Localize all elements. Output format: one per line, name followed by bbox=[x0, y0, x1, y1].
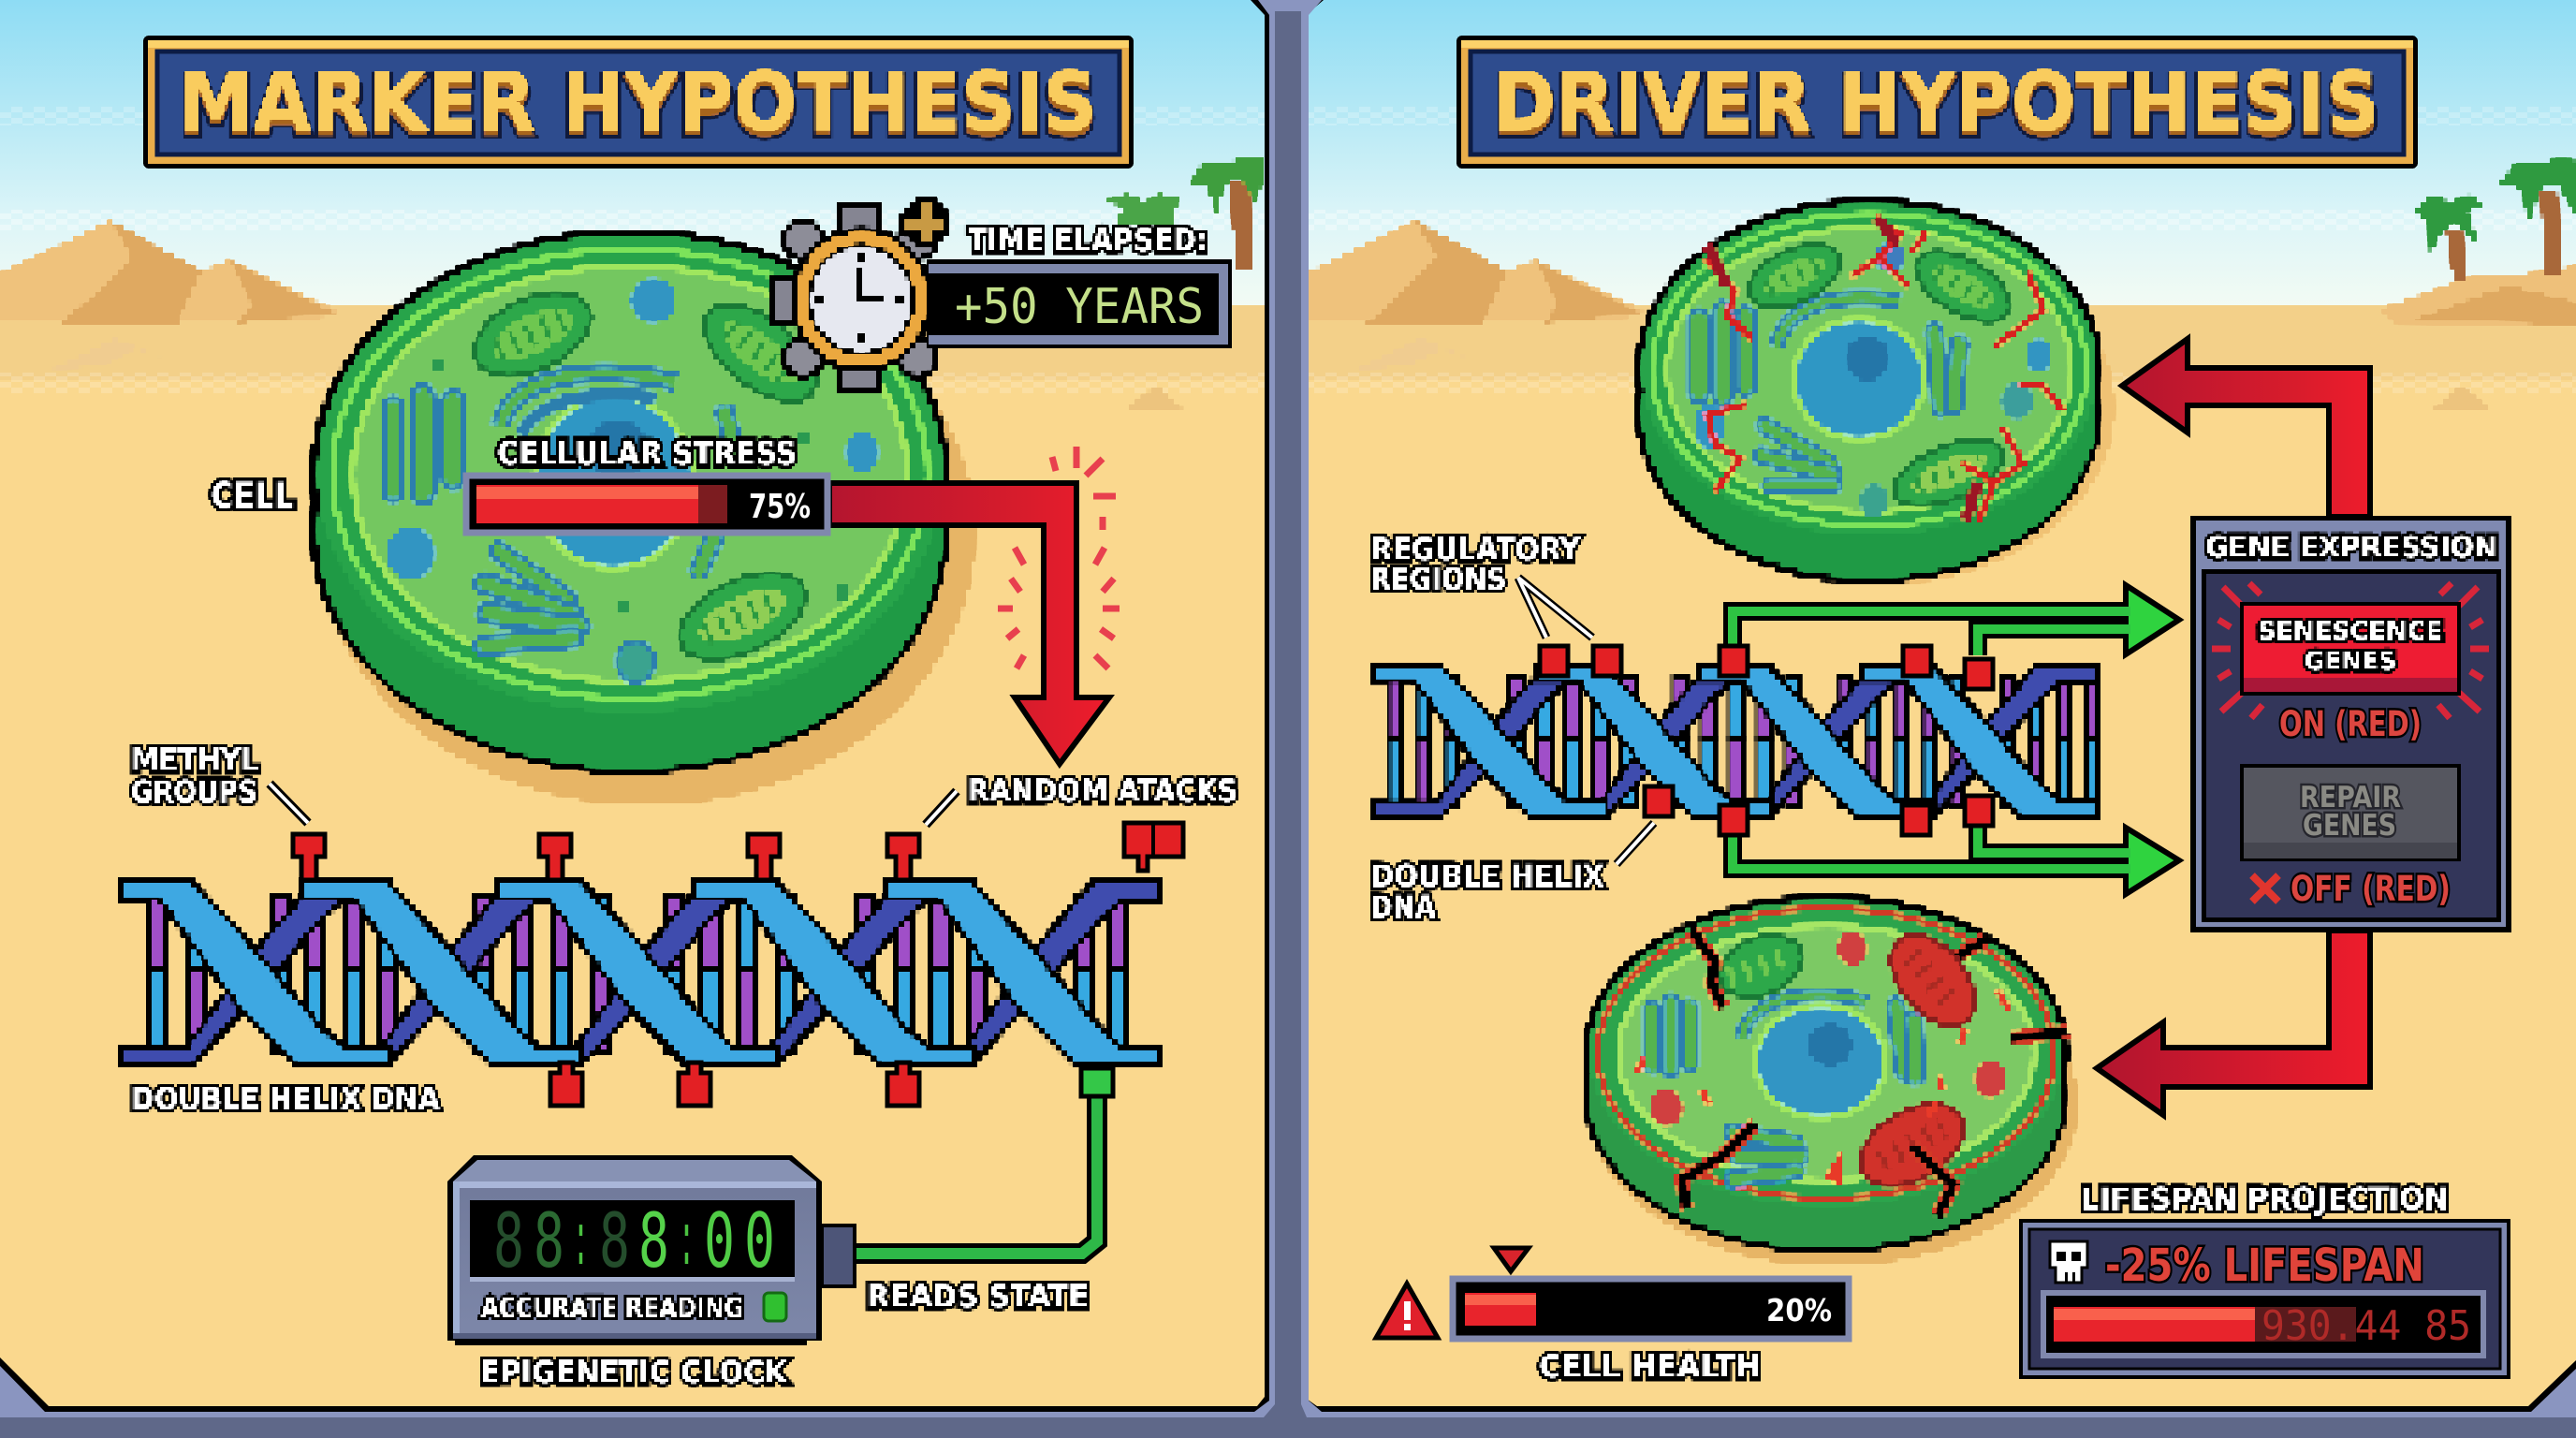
cellular stress gauge bbox=[466, 435, 827, 533]
stopwatch icon bbox=[773, 197, 949, 389]
label: double helix DNA right: DOUBLE HELIX bbox=[1370, 858, 1604, 894]
label: methyl groups: METHYL bbox=[131, 741, 258, 778]
bottom right cell: damaged with black cracks bbox=[1583, 894, 2078, 1266]
red impact sparks bbox=[998, 447, 1120, 668]
label: regulatory regions: REGULATORY bbox=[1370, 531, 1581, 567]
time elapsed label: TIME ELAPSED: bbox=[968, 222, 1208, 258]
lifespan panel: -25% LIFESPAN bbox=[2105, 1240, 2424, 1292]
cell health gauge bbox=[1453, 1279, 1849, 1339]
seven-segment digits: 8 bbox=[599, 1197, 630, 1284]
left DNA double helix bbox=[122, 882, 1158, 1064]
label: methyl groups: GROUPS bbox=[131, 773, 257, 810]
left panel: title banner: MARKER HYPOTHESIS bbox=[179, 60, 1097, 155]
label: methyl groups bbox=[131, 741, 258, 810]
seven-segment digits: 8 bbox=[638, 1197, 669, 1284]
seven-segment digits: 0 bbox=[744, 1197, 775, 1284]
seven-segment digits: : bbox=[679, 1195, 695, 1282]
front strand bbox=[122, 882, 1158, 1064]
gene expression panel: GENE EXPRESSION bbox=[2205, 531, 2497, 565]
left cell illustration bbox=[310, 228, 975, 805]
seven-segment digits: 0 bbox=[704, 1197, 735, 1284]
gene expression panel: OFF (RED) bbox=[2291, 869, 2451, 909]
+50 years readout: +50 YEARS bbox=[955, 279, 1204, 335]
cellular stress gauge: 75% bbox=[749, 488, 811, 526]
green wire from DNA to clock bbox=[848, 1068, 1113, 1254]
leader line: methyl groups bbox=[270, 784, 308, 823]
repair genes button: GENES bbox=[2303, 809, 2396, 843]
label: regulatory regions: REGIONS bbox=[1370, 561, 1506, 597]
scenery: left dunes and palm trees bbox=[0, 155, 1265, 412]
green arrow: regulatory regions to repair genes bbox=[1733, 824, 2179, 894]
label: lifespan projection: LIFESPAN PROJECTION bbox=[2081, 1181, 2449, 1217]
back strand bbox=[122, 882, 1158, 1064]
off indicator bbox=[2252, 875, 2278, 902]
rays around active button bbox=[2212, 583, 2489, 718]
label: cell: CELL bbox=[211, 476, 294, 516]
regulatory region markers on right DNA bbox=[1540, 646, 1993, 835]
+50 years readout bbox=[927, 259, 1232, 348]
gene expression panel bbox=[2190, 516, 2511, 932]
skull icon bbox=[2050, 1241, 2087, 1283]
label: double helix DNA right: DNA bbox=[1370, 888, 1436, 925]
green arrow: regulatory regions to senescence genes bbox=[1733, 585, 2179, 655]
leader line highlights bbox=[270, 784, 957, 825]
label: double helix DNA right bbox=[1370, 858, 1604, 925]
repair genes button bbox=[2240, 764, 2461, 861]
label: cell health: CELL HEALTH bbox=[1539, 1348, 1761, 1385]
left panel: title banner: MARKER HYPOTHESIS bbox=[179, 54, 1097, 150]
repair genes button: REPAIR bbox=[2300, 781, 2401, 814]
red arrow: gene expression up to stressed cell bbox=[2122, 339, 2370, 517]
warning triangle icon bbox=[1376, 1284, 1438, 1338]
label: double helix DNA left: DOUBLE HELIX DNA bbox=[131, 1080, 440, 1117]
seven-segment digits: 8 bbox=[493, 1197, 524, 1284]
health down marker bbox=[1494, 1248, 1529, 1271]
label: epigenetic clock: EPIGENETIC CLOCK bbox=[480, 1354, 788, 1390]
leader lines: regulatory regions bbox=[1518, 578, 1592, 638]
seven-segment digits: 8 bbox=[534, 1197, 564, 1284]
right panel: title banner: DRIVER HYPOTHESIS bbox=[1493, 60, 2380, 155]
rungs bbox=[151, 894, 1127, 1050]
top right cell: stressed with red cracks bbox=[1635, 198, 2115, 585]
label: regulatory regions bbox=[1370, 531, 1581, 597]
right DNA double helix bbox=[1371, 667, 2099, 816]
seven-segment digits bbox=[493, 1195, 775, 1284]
seven-segment digits: : bbox=[573, 1195, 589, 1282]
scenery: right dunes and palm trees bbox=[1306, 157, 2576, 412]
stopwatch hands and ticks bbox=[814, 253, 904, 343]
front strand bbox=[1371, 667, 2098, 816]
epigenetic clock device: ACCURATE READING bbox=[481, 1292, 743, 1324]
rungs bbox=[1389, 677, 2099, 805]
lifespan panel bbox=[2019, 1219, 2510, 1379]
cell health gauge: 20% bbox=[1766, 1292, 1832, 1328]
senescence genes button: SENESCENCE bbox=[2258, 617, 2443, 646]
left panel: title banner bbox=[143, 36, 1134, 169]
red arrow: gene expression down to damaged cell bbox=[2097, 931, 2370, 1115]
leader line: double helix DNA right bbox=[1617, 823, 1654, 864]
right panel: title banner bbox=[1456, 36, 2418, 169]
back strand bbox=[1371, 667, 2098, 816]
leader line: random attacks bbox=[926, 791, 957, 825]
cellular stress gauge: CELLULAR STRESS bbox=[497, 435, 797, 473]
right panel: title banner: DRIVER HYPOTHESIS bbox=[1493, 54, 2380, 150]
methyl group tags on left DNA bbox=[293, 823, 1183, 1106]
red arrow from cellular stress to DNA bbox=[829, 483, 1109, 764]
senescence genes button bbox=[2240, 602, 2461, 696]
gene expression panel: ON (RED) bbox=[2279, 704, 2422, 744]
senescence genes button: GENES bbox=[2305, 647, 2396, 676]
label: reads state: READS STATE bbox=[867, 1278, 1089, 1314]
lifespan panel: 930.44 85 bbox=[2261, 1302, 2471, 1350]
label: random attacks: RANDOM ATACKS bbox=[968, 772, 1237, 809]
epigenetic clock device bbox=[447, 1155, 855, 1345]
